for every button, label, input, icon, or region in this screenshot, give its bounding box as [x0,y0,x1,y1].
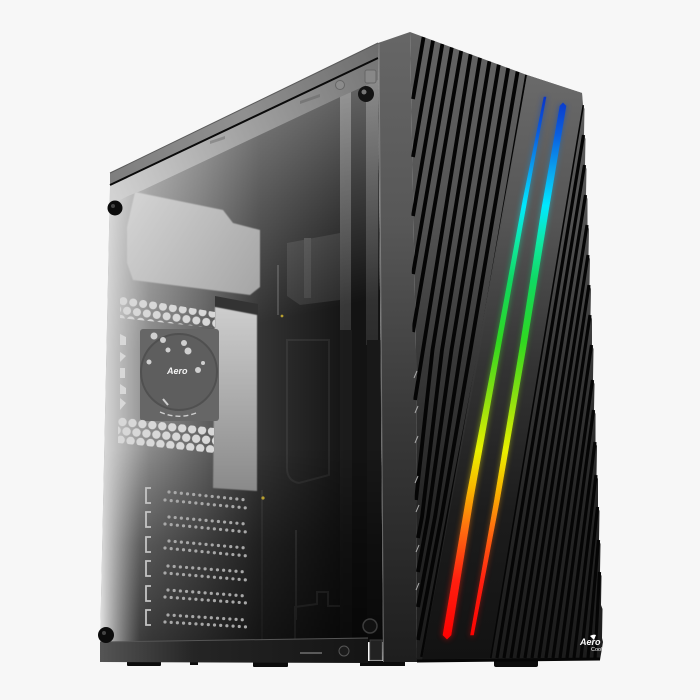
left ridge lines [413,37,527,657]
fan logo: Aero [166,366,188,376]
flat light band [422,75,582,660]
bottom edge [417,659,600,661]
inner frame uprights [340,90,351,340]
light fade overlays [100,100,341,642]
rgb led strip right [470,103,566,638]
brand logo: Aero [579,637,601,647]
ridged front panel [410,32,603,662]
glass side panel [90,50,390,650]
top rail [110,43,378,185]
fan grille holes [146,332,205,416]
left holes [120,334,126,410]
frame slots [210,94,320,144]
panel base [410,32,603,662]
front bezel [378,32,417,662]
glass screws [98,86,377,643]
upper honeycomb [120,296,215,328]
rgb led strip left [442,97,546,640]
fan [140,329,219,421]
product image: PC case [98,32,603,667]
lower honeycomb [118,417,214,453]
cross bar [215,296,257,314]
standoff dots [261,496,265,500]
psu shroud [127,192,260,295]
top frame strip [110,58,378,205]
frame screw ring [336,80,344,90]
expansion slot brackets [146,488,151,625]
bottom rail [100,638,382,663]
brand logo [579,635,602,653]
drive cage [262,233,340,640]
right ridge lines [490,105,600,658]
pci vent dots [165,492,248,627]
window opening [213,307,257,491]
left ridge ticks [414,371,419,590]
interior [90,50,390,650]
feet [127,658,538,667]
brand logo: Cool [591,647,602,653]
